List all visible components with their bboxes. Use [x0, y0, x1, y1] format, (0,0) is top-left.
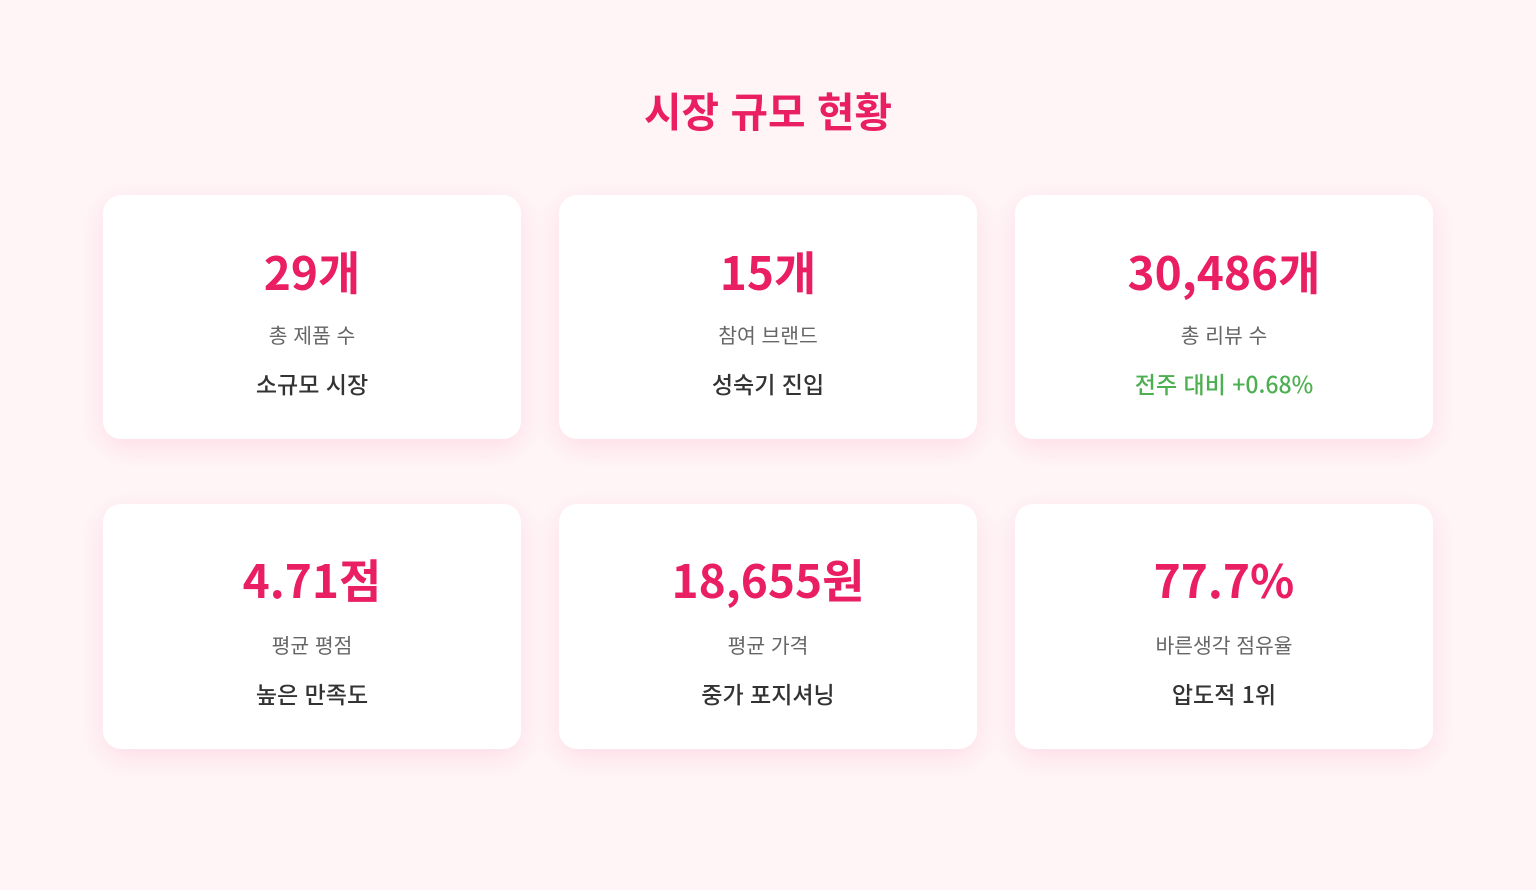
label: reviews: 총 리뷰 수 [1181, 319, 1267, 349]
panel: brand share [1015, 504, 1433, 749]
value: brands: 15개 [720, 238, 816, 304]
label: price: 평균 가격 [728, 629, 808, 659]
note: overwhelming first place: 압도적 1위 [1172, 676, 1276, 710]
note: week over week change: 전주 대비 +0.68% [1135, 366, 1313, 400]
value: total products: 29개 [264, 238, 360, 304]
note: small market: 소규모 시장 [256, 366, 368, 400]
panel: total products [103, 195, 521, 439]
value: rating: 4.71점 [243, 546, 381, 612]
label: brands: 참여 브랜드 [718, 319, 818, 349]
note: maturity entry: 성숙기 진입 [712, 366, 824, 400]
panel: average rating [103, 504, 521, 749]
value: reviews: 30,486개 [1127, 238, 1321, 304]
note: high satisfaction: 높은 만족도 [256, 676, 368, 710]
title: 시장 규모 현황 [644, 80, 892, 139]
panel: average price [559, 504, 977, 749]
value: price: 18,655원 [671, 546, 865, 612]
label: rating: 평균 평점 [272, 629, 352, 659]
label: total products: 총 제품 수 [269, 319, 355, 349]
panel: total reviews [1015, 195, 1433, 439]
label: share: 바른생각 점유율 [1155, 629, 1293, 659]
panel: participating brands [559, 195, 977, 439]
value: share: 77.7% [1154, 546, 1294, 612]
note: mid-price positioning: 중가 포지셔닝 [701, 676, 835, 710]
